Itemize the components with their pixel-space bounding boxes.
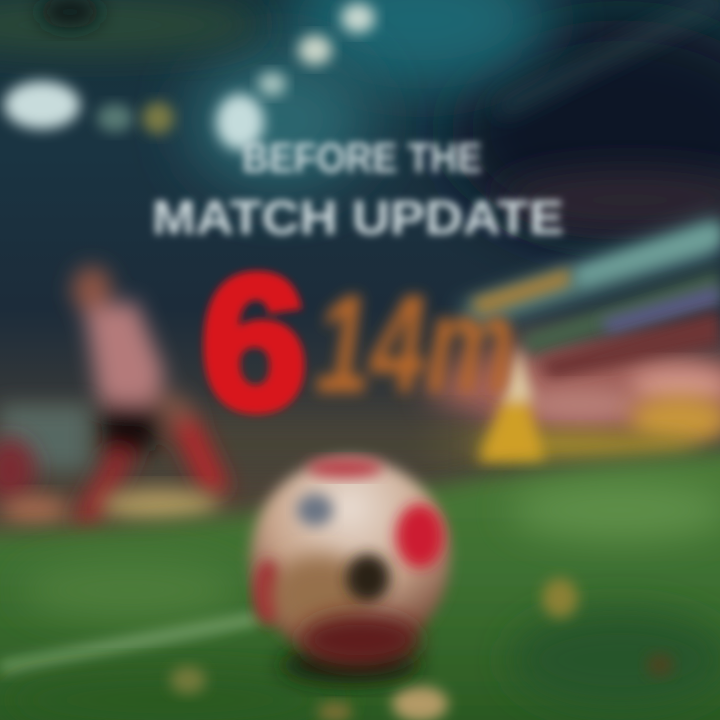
colourful stands bbox=[0, 215, 720, 470]
headline text: MATCH UPDATE bbox=[152, 192, 564, 245]
football bbox=[250, 458, 450, 683]
big number: 6 bbox=[201, 237, 307, 449]
player bbox=[70, 266, 230, 530]
headline text bbox=[152, 134, 564, 245]
left pitch-side objects bbox=[0, 405, 220, 524]
headline text: BEFORE THE bbox=[242, 134, 482, 181]
pitch bbox=[0, 448, 720, 720]
big number: 14m bbox=[315, 265, 515, 422]
background: stadium sky bbox=[0, 0, 720, 560]
floodlights bbox=[4, 3, 375, 150]
big number bbox=[201, 237, 515, 449]
yellow cone bbox=[478, 345, 545, 462]
